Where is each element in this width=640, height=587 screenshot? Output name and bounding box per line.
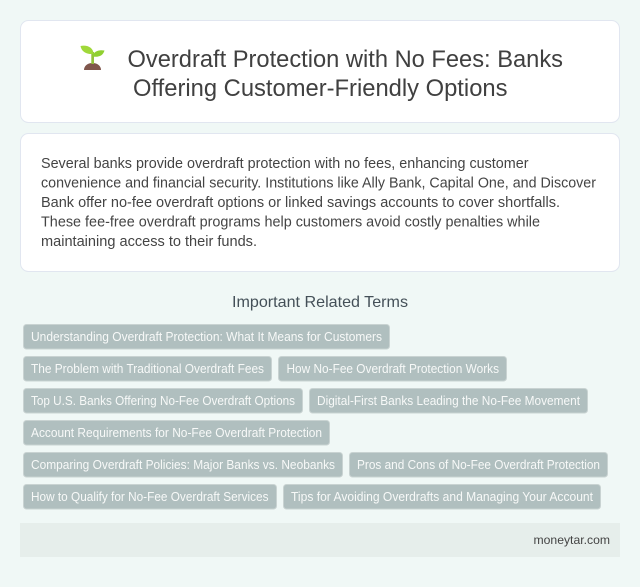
tag: [24, 484, 276, 509]
tag: Tips for Avoiding Overdrafts and Managing Your Account: [291, 490, 594, 504]
title: Overdraft Protection with No Fees: Banks: [128, 46, 563, 73]
tag: How to Qualify for No-Fee Overdraft Services: [31, 490, 268, 504]
tag: [24, 356, 272, 381]
tag: The Problem with Traditional Overdraft Fees: [31, 362, 264, 376]
tag: [24, 420, 330, 445]
tag: [310, 388, 588, 413]
text block: intro: These fee-free overdraft programs help customers avoid costly penalties while: [41, 214, 540, 230]
tag list: [24, 324, 608, 509]
tag: [350, 452, 608, 477]
tag: Pros and Cons of No-Fee Overdraft Protection: [357, 458, 600, 472]
panel: title header: [20, 20, 620, 122]
title: Offering Customer-Friendly Options: [133, 75, 508, 102]
text block: intro: maintaining access to their funds.: [41, 233, 257, 250]
tag: [24, 388, 302, 413]
panel: intro paragraph: [20, 134, 620, 272]
tag: Comparing Overdraft Policies: Major Banks vs. Neobanks: [31, 458, 335, 472]
tag: [284, 484, 600, 509]
text block: intro: Several banks provide overdraft protection with no fees, enhancing customer: [41, 155, 529, 172]
text block: intro: Bank offer no-fee overdraft options or linked savings accounts to cover shortfalls.: [41, 194, 560, 211]
tag: [24, 324, 390, 349]
tag: [24, 452, 342, 477]
footer: [20, 523, 620, 557]
title: [128, 46, 563, 102]
tag: Understanding Overdraft Protection: What It Means for Customers: [31, 330, 382, 344]
tag: How No-Fee Overdraft Protection Works: [286, 362, 499, 376]
icon: sprout: [80, 46, 104, 70]
text block: intro: convenience and financial security. Institutions like Ally Bank, Capital One, and Discover: [41, 174, 596, 192]
footer: moneytar.com: [534, 533, 610, 547]
heading: important related terms: Important Related Terms: [232, 294, 408, 311]
tag: Top U.S. Banks Offering No-Fee Overdraft Options: [31, 394, 295, 408]
tag: Account Requirements for No-Fee Overdraft Protection: [31, 426, 322, 440]
tag: [278, 356, 506, 381]
text block: intro: [41, 155, 596, 250]
tag: Digital-First Banks Leading the No-Fee Movement: [317, 394, 580, 408]
